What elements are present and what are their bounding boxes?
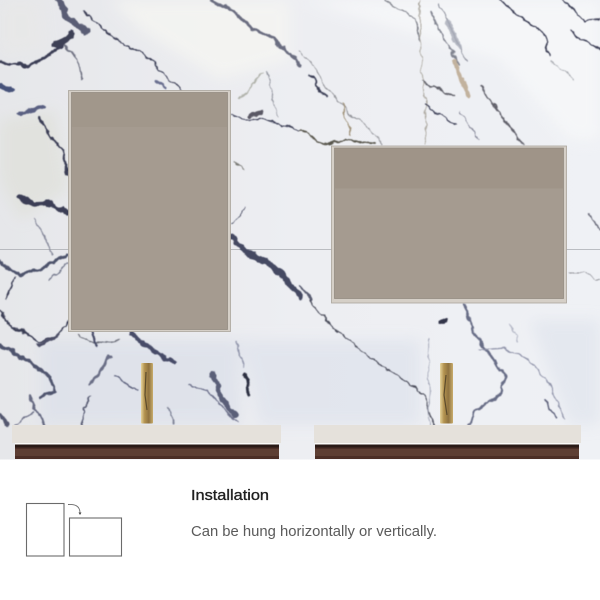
text: installation description: Can be hung horizontally or vertically. <box>191 524 437 540</box>
panel: left vertical mirror <box>68 90 230 332</box>
left vanity <box>12 425 281 459</box>
marble wall photo <box>0 0 600 460</box>
icon: portrait to landscape rotation <box>26 504 122 556</box>
heading: Installation: Installation <box>191 488 269 504</box>
dark veins <box>0 0 600 425</box>
right vanity <box>314 425 581 459</box>
white caption band <box>0 460 600 600</box>
panel: right horizontal mirror <box>332 146 566 303</box>
left faucet <box>141 363 153 424</box>
right faucet <box>440 363 453 424</box>
tile joints <box>0 248 600 250</box>
